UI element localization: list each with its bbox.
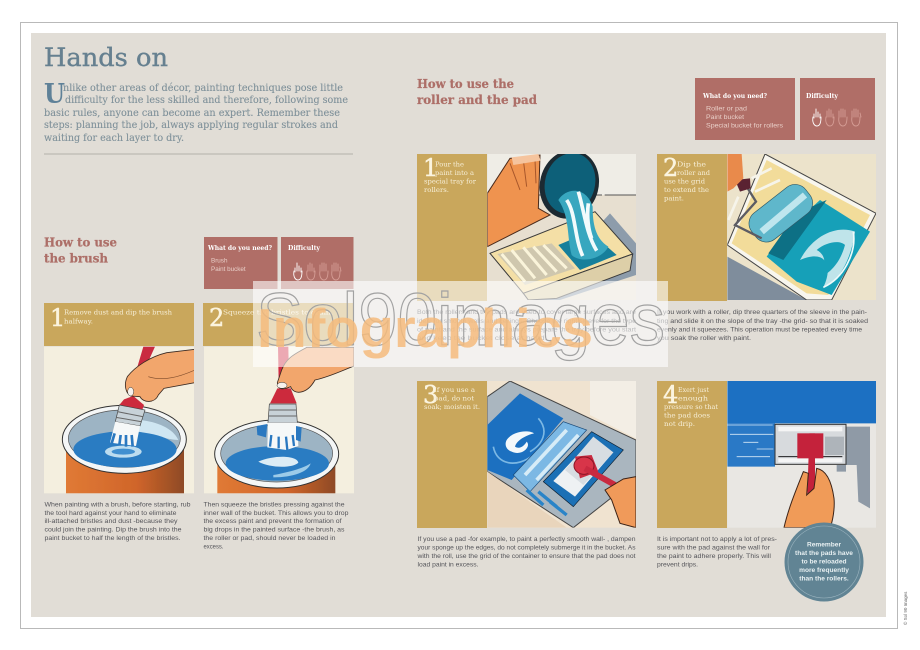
panel: brush what do you need xyxy=(204,237,278,289)
text: pad step 3: If you use a pad -for example, to paint a perfectly smooth wall- , dampen xyxy=(418,536,636,543)
intro text: nlike other areas of décor, painting techniques pose little xyxy=(63,83,343,94)
text: brush step 2 xyxy=(204,502,349,550)
text: brush step 2: the excess paint and prevent the formation of xyxy=(204,518,342,525)
panel: brush what do you need: What do you need? xyxy=(207,244,272,252)
heading: brush xyxy=(44,234,117,266)
text: roller step 1: Both the rollers and the pads are used to cover large surfaces and are xyxy=(417,309,637,316)
intro text: U xyxy=(44,79,65,110)
panel: roller what do you need: Roller or pad xyxy=(706,106,748,112)
text: brush step 2: Then squeeze the bristles pressing against the xyxy=(204,502,345,508)
panel: roller what do you need: Special bucket for rollers xyxy=(706,122,783,130)
text: roller step 2 xyxy=(657,309,868,342)
text: pad step 3: load paint in excess. xyxy=(418,562,479,568)
text: roller step 1: and keep the bucket close at hand. xyxy=(417,335,547,342)
text: brush step 1 xyxy=(44,502,191,542)
heading: roller and pad: How to use the xyxy=(417,76,514,91)
step 4 roller: 4 xyxy=(663,381,678,409)
step 3 roller xyxy=(417,381,487,528)
callout: remember xyxy=(784,522,864,602)
panel: brush what do you need: Paint bucket xyxy=(211,266,246,273)
icon: difficulty hands xyxy=(813,109,861,126)
panel: roller difficulty: Difficulty xyxy=(806,92,838,100)
text: roller step 1: of paint and the surface and always prepare the tray before you start xyxy=(417,326,636,334)
step 2 roller: Dip the xyxy=(677,160,706,168)
heading: roller and pad: roller and the pad xyxy=(417,92,537,107)
step 2 brush: Squeeze the bristles to drain. xyxy=(223,308,333,316)
text: brush step 1: the tool hard against your hand to eliminate xyxy=(44,510,177,517)
step 4 roller: the pad does xyxy=(664,412,711,420)
text: pad step 4: prevent drips. xyxy=(657,562,698,568)
text: brush step 2: big drops in the painted surface -the brush, as xyxy=(204,526,344,534)
intro text: difficulty for the less skilled and therefore, following some xyxy=(65,95,348,106)
step 2 brush: 2 xyxy=(209,304,224,332)
intro text xyxy=(44,79,348,144)
heading: roller and pad xyxy=(417,76,537,107)
step 4 roller: pressure so that xyxy=(664,403,718,411)
callout: remember: than the rollers. xyxy=(799,576,849,582)
step 2 roller: roller and xyxy=(677,169,711,177)
step 2 roller: 2 xyxy=(663,154,678,182)
step 1 roller: Pour the xyxy=(435,160,464,168)
step 4 roller: not drip. xyxy=(664,420,695,428)
callout: remember: that the pads have xyxy=(795,550,853,557)
step 1 roller: 1 xyxy=(423,154,438,182)
step 3 roller: 3 xyxy=(423,381,438,409)
text: pad step 3 xyxy=(416,536,636,568)
step 1 roller xyxy=(417,154,487,301)
text: pad step 3: your sponge up the edges, do not completely submerge it in the bucket. As xyxy=(418,544,636,552)
intro text: waiting for each layer to dry. xyxy=(44,133,184,144)
step 1 brush: halfway. xyxy=(64,318,93,326)
step 1 roller: rollers. xyxy=(424,186,449,194)
step 2 roller: use the grid xyxy=(664,178,706,186)
step 1 brush: Remove dust and dip the brush xyxy=(64,308,173,316)
panel: roller difficulty xyxy=(800,78,875,140)
step 4 roller: enough xyxy=(678,394,709,402)
text: roller step 1: ideal for smooth walls and ceilings. Choose the right sleeve for the type xyxy=(417,318,637,325)
text: roller step 2: If you work with a roller, dip three quarters of the sleeve in the pain- xyxy=(657,309,867,316)
credit: © Sol 90 Images xyxy=(902,591,908,625)
icon: difficulty hands xyxy=(294,263,341,280)
heading: brush: How to use xyxy=(44,234,117,250)
illustration: pad on wall xyxy=(727,381,876,528)
step 4 roller xyxy=(657,381,727,528)
text: roller step 1 xyxy=(417,309,637,342)
panel: roller what do you need: What do you need? xyxy=(702,92,767,100)
panel: roller what do you need: Paint bucket xyxy=(706,114,744,121)
text: brush step 2: excess. xyxy=(204,544,224,550)
text: pad step 4: It is important not to apply a lot of pres- xyxy=(657,536,777,543)
heading: brush: the brush xyxy=(44,250,108,266)
text: roller step 2: ting and slide it on the slope of the tray -the grid- so that it is soaked xyxy=(657,318,868,325)
panel: roller what do you need xyxy=(695,78,795,140)
intro text: steps: planning the job, always applying regular strokes and xyxy=(44,120,339,131)
step 2 roller: paint. xyxy=(664,194,684,202)
panel: brush difficulty: Difficulty xyxy=(288,244,320,252)
text: roller step 2: you soak the roller with paint. xyxy=(657,335,751,342)
text: pad step 4: the paint to adhere properly. This will xyxy=(657,553,771,560)
watermark: Infographics xyxy=(257,297,593,359)
intro text: basic rules, anyone can become an expert. Remember these xyxy=(44,108,340,119)
step 2 brush xyxy=(203,303,353,346)
step 3 roller: pad, do not xyxy=(434,394,474,402)
step 3 roller: If you use a xyxy=(434,386,475,394)
step 2 roller xyxy=(657,154,727,301)
illustration: brush dipping in bucket xyxy=(44,347,195,493)
step 1 brush xyxy=(44,303,194,346)
text: pad step 3: with the roll, use the grid of the container to ensure that the pad does not xyxy=(416,553,636,560)
text: pad step 4: sure with the pad against the wall for xyxy=(657,544,770,552)
watermark: Sol90images xyxy=(256,278,665,361)
text: brush step 1: paint bucket to half the length of the bristles. xyxy=(44,535,181,542)
panel: brush difficulty xyxy=(281,237,354,289)
illustration: pad in tray xyxy=(487,381,636,528)
illustration: roller in tray xyxy=(727,154,876,300)
panel: brush what do you need: Brush xyxy=(211,258,228,264)
text: brush step 1: When painting with a brush, before starting, rub xyxy=(44,502,191,508)
text: brush step 1: ill-attached bristles and dust -because they xyxy=(44,518,179,525)
step 1 brush: 1 xyxy=(50,304,65,332)
step 1 roller: special tray for xyxy=(424,178,477,186)
illustration: pouring paint into tray xyxy=(487,143,636,300)
text: brush step 1: could join the painting. Dip the brush into the xyxy=(44,526,182,534)
text: pad step 4 xyxy=(657,536,777,568)
step 2 roller: to extend the xyxy=(664,186,709,194)
step 4 roller: Exert just xyxy=(678,386,709,394)
step 1 roller: paint into a xyxy=(435,169,474,177)
text: brush step 2: inner wall of the bucket. This allows you to drop xyxy=(204,510,349,517)
illustration: brush squeezed against bucket xyxy=(204,347,354,493)
step 3 roller: soak; moisten it. xyxy=(424,403,480,411)
callout: remember: to be reloaded xyxy=(801,558,847,566)
text: roller step 2: evenly and it squeezes. This operation must be repeated every time xyxy=(657,326,863,334)
title: Hands on xyxy=(44,43,168,73)
text: brush step 2: the roller or pad, should never be loaded in xyxy=(204,535,336,542)
callout: remember: more frequently xyxy=(799,567,849,574)
callout: remember: Remember xyxy=(807,542,841,548)
